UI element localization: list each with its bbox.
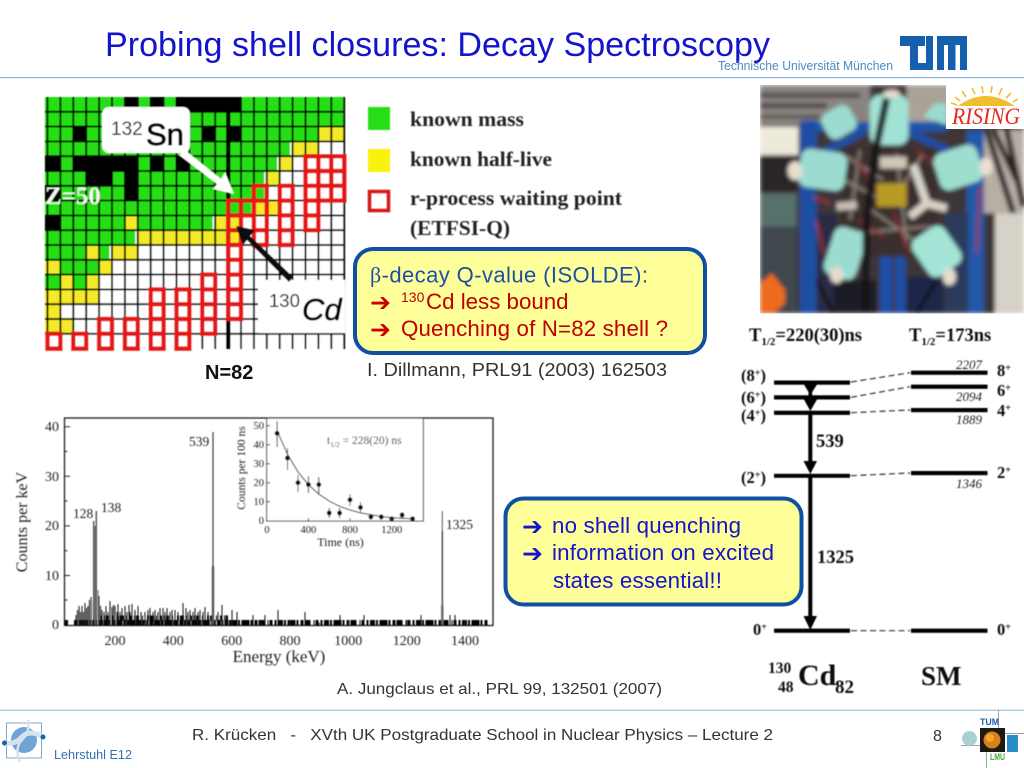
legend text: known mass: known mass xyxy=(410,107,524,131)
citation: Dillmann: I. Dillmann, PRL91 (2003) 162503 xyxy=(367,360,667,380)
callout: Q-value: Cd less bound xyxy=(426,289,569,314)
icon: partner logos xyxy=(961,710,1024,768)
inset: decay curve xyxy=(236,421,415,549)
label: 130Cd: 130 xyxy=(269,290,300,311)
inset numbers: 400 xyxy=(301,525,316,536)
peak: 1325 xyxy=(441,511,443,625)
peak labels: 539 xyxy=(189,434,210,449)
callout: conclusion: information on excited xyxy=(552,540,774,565)
icon: RISING logo: RISING xyxy=(951,104,1020,129)
error bars xyxy=(277,421,402,520)
icon: RISING logo xyxy=(946,85,1024,129)
level scheme: 130Cd vs shell model: 1889 xyxy=(956,412,982,427)
x axis numbers: 200 xyxy=(104,634,126,649)
spin labels and energies: ) xyxy=(760,366,766,385)
spin labels and energies: ) xyxy=(760,388,766,407)
x axis numbers: 1400 xyxy=(451,634,479,649)
spin labels and energies: 6 xyxy=(997,381,1005,400)
legend swatch: known mass xyxy=(368,107,390,130)
callout: conclusion: ➔ xyxy=(522,512,543,541)
inset numbers: 1200 xyxy=(381,525,402,536)
spin labels and energies: (8 xyxy=(741,366,755,385)
spin labels and energies: 4 xyxy=(997,401,1005,420)
inset numbers: 20 xyxy=(254,478,264,489)
callout: Q-value: ➔ xyxy=(370,288,391,317)
inset numbers: 0 xyxy=(264,525,270,536)
spin labels and energies: + xyxy=(755,368,761,379)
callout: Q-value xyxy=(355,249,705,353)
y axis numbers: 40 xyxy=(45,420,59,435)
red waiting-point cells xyxy=(48,156,344,349)
inset: decay curve: Counts per 100 ns xyxy=(236,426,248,510)
inset numbers: 10 xyxy=(254,497,264,508)
x axis numbers: 600 xyxy=(221,634,242,649)
spin labels and energies: + xyxy=(1005,363,1011,374)
main frame xyxy=(64,418,493,626)
N=82 label: N=82 xyxy=(205,362,253,384)
spin labels and energies: + xyxy=(755,390,761,401)
yellow cells: known half-life xyxy=(45,127,344,334)
legend text: known half-live: known half-live xyxy=(410,147,552,171)
peak labels: 138 xyxy=(101,500,122,515)
legend swatch: known half-live xyxy=(368,149,390,172)
spin labels and energies: 0 xyxy=(753,620,761,639)
half-life headers: =220(30)ns xyxy=(775,326,862,346)
arrow: to 130Cd xyxy=(236,226,293,282)
half-life headers: 1/2 xyxy=(921,336,936,348)
spin labels and energies: + xyxy=(761,622,767,633)
x axis numbers xyxy=(104,634,479,649)
spectrum noise spikes xyxy=(76,596,455,625)
peak: 128 and 138 xyxy=(92,511,98,625)
level scheme: 130Cd vs shell model: 1346 xyxy=(956,476,982,491)
x axis title: Energy (keV) xyxy=(233,647,325,666)
callout: conclusion: no shell quenching xyxy=(552,513,741,538)
level scheme: 130Cd vs shell model: 2094 xyxy=(956,389,982,404)
label: Lehrstuhl E12: Lehrstuhl E12 xyxy=(54,747,132,762)
spin labels and energies: (6 xyxy=(741,388,755,407)
green cells: known mass xyxy=(45,97,344,289)
footer text: R. Krücken - XVth UK Postgraduate School in Nuclear Physics – Lecture 2 xyxy=(192,727,773,744)
label: Z=50: Z=50 xyxy=(45,183,101,210)
chart: nuclide chart with r-process waiting points xyxy=(45,97,345,349)
spin labels and energies: 1325 xyxy=(817,548,854,568)
inset ticks xyxy=(267,426,392,521)
callout: Q-value: Quenching of N=82 shell ? xyxy=(401,316,668,341)
y axis title: Counts per keV xyxy=(14,471,31,572)
label: 130Cd xyxy=(258,280,345,333)
level scheme: 130Cd vs shell model: 2207 xyxy=(956,357,982,372)
y axis numbers: 20 xyxy=(45,519,59,534)
y axis numbers: 10 xyxy=(45,569,59,584)
legend: chart key xyxy=(368,107,623,240)
half-life annotation: t xyxy=(327,435,330,447)
half-life annotation: = 228(20) ns xyxy=(340,435,402,447)
legend text: ETFSI-Q: (ETFSI-Q) xyxy=(410,216,510,240)
half-life headers: T xyxy=(909,326,921,346)
spin labels and energies xyxy=(741,361,1011,639)
callout: conclusion: ➔ xyxy=(522,539,543,568)
icon: TUM logo xyxy=(900,36,967,70)
inset numbers: 50 xyxy=(254,421,264,432)
citation: Jungclaus: A. Jungclaus et al., PRL 99, 132501 (2007) xyxy=(337,681,662,698)
spin labels and energies: 8 xyxy=(997,361,1005,380)
label: 132Sn: 132 xyxy=(111,119,143,140)
arrow: to 132Sn xyxy=(179,150,234,194)
spin labels and energies: + xyxy=(1005,622,1011,633)
spin labels and energies: 0 xyxy=(997,620,1005,639)
peak labels xyxy=(73,434,473,532)
TUM wordmark: Technische Universität München xyxy=(718,59,893,73)
y axis numbers: 30 xyxy=(45,470,59,485)
spin labels and energies: 2 xyxy=(997,463,1005,482)
nuclide label: 130 xyxy=(768,660,792,677)
spin labels and energies: 539 xyxy=(816,432,844,452)
label: 132Sn: Sn xyxy=(146,117,184,152)
chart: gamma spectrum xyxy=(14,418,493,666)
callout: Q-value: β-decay Q-value (ISOLDE): xyxy=(370,262,648,288)
callout: Q-value: ➔ xyxy=(370,315,391,344)
level scheme: 130Cd vs shell model xyxy=(741,326,1011,698)
nuclide label: SM xyxy=(921,661,962,691)
black cells: stable nuclei xyxy=(45,97,241,230)
label: 132Sn xyxy=(102,107,190,153)
N=82 magic line xyxy=(226,97,230,349)
y axis numbers: 0 xyxy=(52,618,59,633)
spin labels and energies: ) xyxy=(760,468,766,487)
spin labels and energies: + xyxy=(755,408,761,419)
peak: 539 xyxy=(212,566,214,625)
spin labels and energies: ) xyxy=(760,406,766,425)
spin labels and energies: (2 xyxy=(741,468,755,487)
half-life headers: =173ns xyxy=(935,326,991,346)
page number: 8 xyxy=(933,728,942,745)
inset numbers xyxy=(254,421,402,536)
nuclide label: 48 xyxy=(778,679,794,696)
gamma arrows xyxy=(804,384,817,630)
spectrum baseline bands xyxy=(65,618,488,622)
icon: partner logos: TUM xyxy=(980,717,999,727)
inset frame xyxy=(267,418,423,521)
half-life headers: T xyxy=(749,326,761,346)
nuclide label: Cd xyxy=(798,659,837,692)
peak labels: 128 xyxy=(73,506,94,521)
header rule xyxy=(0,77,1024,78)
photo: RISING detector array xyxy=(760,85,1024,313)
footer rule xyxy=(0,710,1024,711)
x axis numbers: 800 xyxy=(280,634,300,649)
fit curve xyxy=(277,431,413,519)
main ticks xyxy=(65,427,465,625)
half-life headers: 1/2 xyxy=(761,336,776,348)
legend swatch: waiting point xyxy=(370,192,388,210)
inset numbers: 30 xyxy=(254,459,264,470)
callout: Q-value: 130 xyxy=(401,289,425,305)
spin labels and energies: + xyxy=(1005,383,1011,394)
spin labels and energies: + xyxy=(1005,465,1011,476)
grid lines xyxy=(45,97,345,349)
x axis numbers: 400 xyxy=(163,634,184,649)
nuclide label xyxy=(768,659,962,698)
inset axis titles: Time (ns) xyxy=(317,535,364,549)
inset numbers: 800 xyxy=(342,525,358,536)
spin labels and energies: (4 xyxy=(741,406,755,425)
y axis numbers xyxy=(45,420,59,633)
levels xyxy=(774,371,988,633)
half-life headers xyxy=(749,326,991,348)
legend text: waiting point: r-process waiting point xyxy=(410,186,623,210)
x axis numbers: 1200 xyxy=(393,634,421,649)
callout: conclusion: states essential!! xyxy=(553,568,722,593)
title: Probing shell closures: Decay Spectroscopy xyxy=(105,26,771,64)
inset numbers: 40 xyxy=(254,440,264,451)
spin labels and energies: + xyxy=(1005,403,1011,414)
dashed connectors xyxy=(851,373,910,631)
peak labels: 1325 xyxy=(446,517,473,532)
x axis numbers: 1000 xyxy=(334,634,362,649)
inset numbers: 0 xyxy=(259,516,264,527)
label: 130Cd: Cd xyxy=(302,292,343,327)
data points xyxy=(275,431,415,521)
icon: Lehrstuhl E12 logo xyxy=(2,720,46,762)
half-life annotation: 1/2 xyxy=(330,440,340,449)
callout: conclusion xyxy=(506,498,802,604)
nuclide label: 82 xyxy=(835,677,854,698)
icon: partner logos: LMU xyxy=(990,752,1005,762)
spin labels and energies: + xyxy=(755,470,761,481)
